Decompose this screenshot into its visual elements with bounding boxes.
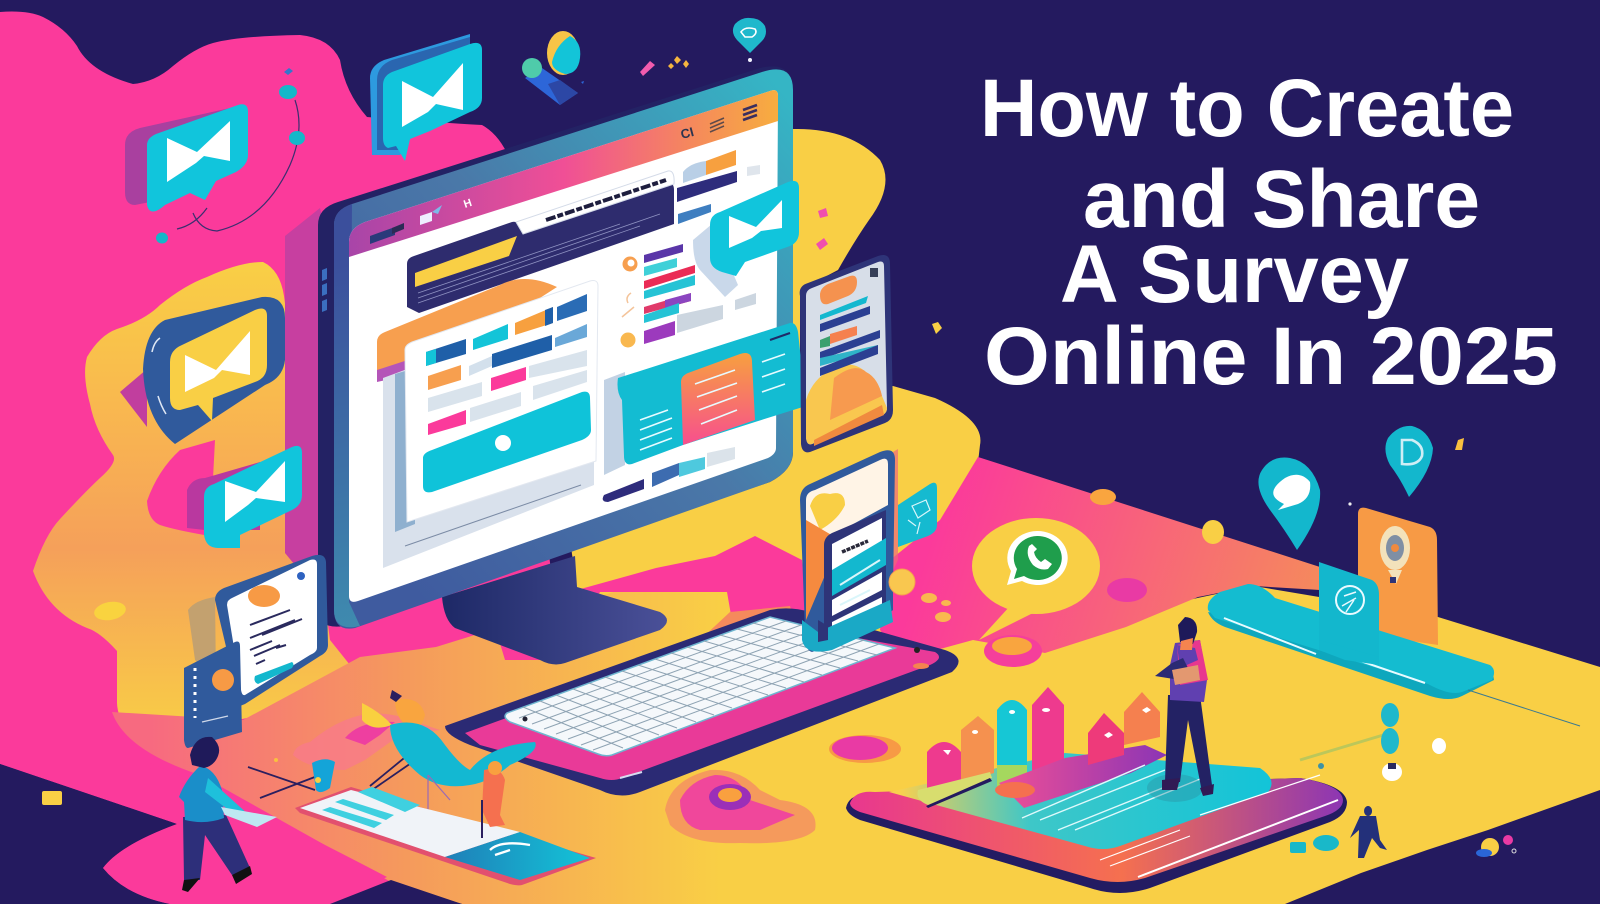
bar: house pink bbox=[1088, 713, 1124, 765]
yellow progress bar bbox=[415, 236, 517, 287]
phone handset bbox=[1028, 544, 1052, 570]
teal card with icon bbox=[1319, 562, 1379, 657]
floor bbox=[112, 586, 1600, 904]
monitor bezel bbox=[334, 69, 793, 629]
teal tag card bbox=[898, 483, 937, 547]
purple flap bbox=[999, 745, 1167, 808]
blue id card bbox=[184, 642, 242, 748]
monitor stand bbox=[442, 556, 667, 664]
small teal items on floor bbox=[1290, 835, 1339, 853]
phone list panel bbox=[824, 510, 886, 640]
phone foot bbox=[802, 600, 893, 652]
title line 3: A Survey bbox=[1060, 229, 1409, 320]
pink button bbox=[832, 736, 888, 760]
teal tray bbox=[1208, 562, 1580, 726]
pink cutout in left blob bbox=[147, 440, 215, 536]
cup bbox=[312, 759, 335, 792]
bar: pink bbox=[927, 742, 961, 800]
list lines bbox=[1022, 765, 1210, 830]
confetti right of monitor bbox=[816, 208, 1464, 450]
bar: orange bbox=[961, 716, 994, 783]
at-sign shape floor bbox=[665, 770, 816, 843]
person with tablet (left) bbox=[179, 737, 277, 892]
bar: cyan bbox=[997, 700, 1027, 790]
browser header icons bbox=[370, 105, 757, 244]
whatsapp logo bbox=[1007, 531, 1068, 585]
orange pill bbox=[248, 585, 280, 607]
pin icon cluster top bbox=[522, 31, 584, 105]
button dot bbox=[495, 435, 511, 451]
platform tablet bbox=[846, 687, 1347, 893]
dotted orbit connector bbox=[156, 68, 305, 244]
cyan button bbox=[423, 392, 591, 492]
yellow coin on left bbox=[93, 599, 127, 623]
pink band under person bbox=[103, 763, 387, 904]
pink blob: left backdrop bbox=[0, 12, 560, 904]
pink stripe: floor right bbox=[880, 457, 1320, 660]
small yellow tag bbox=[42, 791, 62, 805]
monitor side buttons bbox=[322, 268, 327, 312]
monitor body bbox=[318, 66, 793, 627]
monitor shadow bbox=[285, 208, 340, 620]
floating balls right bbox=[1300, 703, 1446, 781]
pink backing bbox=[850, 449, 898, 610]
panel lines bbox=[418, 214, 660, 303]
speech bubble 5 bbox=[693, 181, 799, 297]
pink wash under monitor bbox=[490, 536, 810, 660]
shoes bbox=[1162, 778, 1214, 796]
torso bbox=[1170, 640, 1207, 702]
floor blobs around whatsapp bbox=[921, 489, 1224, 667]
title line 4: Online In 2025 bbox=[984, 311, 1558, 402]
orange wash: floor centre bbox=[700, 606, 800, 640]
whatsapp bubble bbox=[972, 518, 1100, 640]
title line 2: and Share bbox=[1083, 154, 1480, 245]
speech bubble 4 bbox=[187, 446, 302, 548]
bar: pink tall bbox=[1032, 687, 1064, 787]
legs bbox=[1165, 695, 1212, 792]
phone mockup lower bbox=[800, 449, 915, 652]
pink sticker and stars bbox=[640, 56, 689, 76]
house highlights bbox=[1104, 707, 1151, 738]
orange tab and grey window bbox=[377, 279, 594, 568]
bar chart bbox=[927, 687, 1064, 800]
bar: house orange bbox=[1124, 692, 1160, 745]
speech bubble 2 bbox=[370, 34, 482, 161]
cyan button bbox=[254, 662, 294, 684]
yellow slider bbox=[917, 772, 992, 805]
title bbox=[980, 63, 1558, 402]
pink shirt arm bbox=[1177, 640, 1208, 685]
browser header bbox=[349, 90, 778, 257]
map pin: D bbox=[1348, 426, 1433, 506]
dish bbox=[390, 722, 536, 786]
phone mockup upper bbox=[800, 255, 893, 452]
shadow under figure bbox=[1147, 774, 1203, 802]
monitor screen bbox=[349, 90, 778, 602]
map pin: chat bbox=[1258, 458, 1320, 550]
navy corner bottom bbox=[330, 880, 462, 904]
speech bubble 1 bbox=[125, 104, 248, 212]
yellow blob: behind monitor right bbox=[570, 129, 980, 610]
grey rule bbox=[405, 485, 581, 546]
speech bubble 3: yellow bbox=[120, 297, 285, 444]
tablet box bbox=[1155, 658, 1190, 680]
label CI: CI bbox=[679, 124, 695, 142]
small dots bottom right bbox=[1476, 835, 1516, 857]
right options list bbox=[620, 150, 760, 348]
browser header icons: H bbox=[462, 197, 474, 211]
keyboard tray bbox=[445, 608, 959, 796]
ellipse pad bbox=[829, 735, 901, 763]
head bbox=[1178, 617, 1197, 644]
navy corner: bottom left bbox=[0, 764, 177, 904]
keyboard keys bbox=[505, 617, 895, 756]
standing person bbox=[1155, 617, 1214, 796]
small person silhouette bbox=[1350, 806, 1387, 858]
white form card bbox=[405, 281, 598, 522]
title line 1: How to Create bbox=[980, 63, 1514, 154]
yellow circle bbox=[972, 518, 1100, 614]
yellow blob: left backdrop bbox=[33, 262, 370, 740]
orange card bbox=[1358, 508, 1438, 645]
white tab bbox=[516, 171, 674, 234]
pin top with chat icon bbox=[733, 18, 766, 62]
dashed text bar bbox=[546, 180, 666, 220]
form mat on floor bbox=[295, 761, 596, 885]
left article card bbox=[188, 555, 328, 706]
figure on mat bbox=[482, 769, 505, 827]
text lines bbox=[250, 610, 302, 664]
satellite dish scene bbox=[248, 690, 536, 815]
monitor bezel left side bbox=[334, 204, 360, 627]
monitor bbox=[318, 66, 806, 664]
platform screen bbox=[889, 753, 1272, 849]
bottom action buttons bbox=[603, 447, 735, 502]
navy form panel bbox=[407, 171, 674, 313]
floating results card bbox=[604, 323, 806, 475]
